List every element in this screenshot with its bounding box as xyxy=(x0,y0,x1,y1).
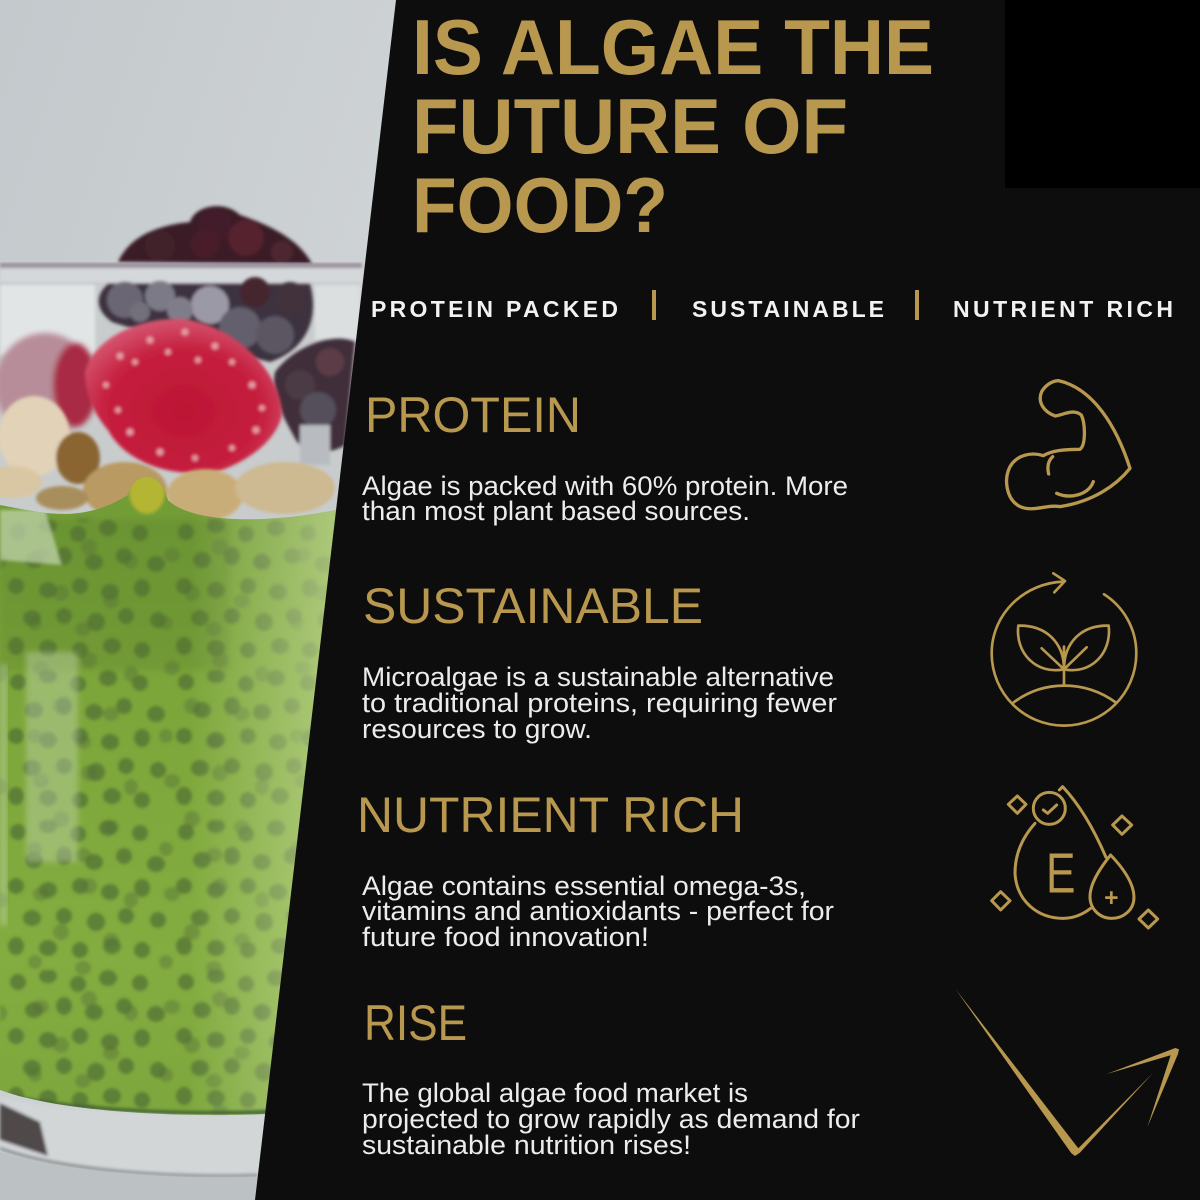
pale raspberry behind xyxy=(0,333,97,437)
heading: sustainable: SUSTAINABLE xyxy=(363,578,703,634)
text: sustainable: Microalgae is a sustainable alternative xyxy=(362,662,834,692)
glass upper wall xyxy=(0,284,360,356)
text: protein: Algae is packed with 60% protein. More xyxy=(362,471,848,501)
icon: vitamin E drops: E xyxy=(1046,841,1075,905)
glass rim xyxy=(0,263,362,282)
text: protein: than most plant based sources. xyxy=(362,496,750,526)
black corner block xyxy=(1005,0,1200,188)
text: sustainable xyxy=(362,662,837,744)
chia seeds xyxy=(0,518,345,1118)
text: rise: sustainable nutrition rises! xyxy=(362,1130,691,1160)
icon: rising arrow xyxy=(956,989,1179,1156)
section: sustainable xyxy=(362,573,1136,744)
text: nutrient rich xyxy=(362,871,834,952)
glass reflections xyxy=(0,510,78,925)
title: FOOD? xyxy=(412,161,668,249)
tagline strip: SUSTAINABLE xyxy=(692,296,884,322)
table surface xyxy=(0,1152,258,1200)
glass base xyxy=(0,1098,266,1176)
tagline strip: NUTRIENT RICH xyxy=(953,296,1173,322)
right side light falloff xyxy=(206,510,336,1115)
text: rise xyxy=(362,1078,860,1160)
title xyxy=(412,3,934,249)
title: FUTURE OF xyxy=(412,82,848,170)
dark berries above rim xyxy=(118,206,312,264)
granola xyxy=(0,396,335,521)
yellow drip highlight xyxy=(129,470,165,514)
section: rise xyxy=(362,989,1179,1160)
photo: green chia smoothie glass with berries xyxy=(0,0,400,1200)
section: nutrient rich xyxy=(357,787,1158,952)
heading: protein: PROTEIN xyxy=(365,387,581,443)
smoothie body xyxy=(0,460,345,1125)
text: nutrient rich: vitamins and antioxidants - perfect for xyxy=(362,896,834,926)
title: IS ALGAE THE xyxy=(412,3,934,91)
text: rise: projected to grow rapidly as demand for xyxy=(362,1104,860,1134)
icon: vitamin E drops xyxy=(992,787,1158,928)
icon: plant in cycle xyxy=(992,573,1136,726)
tagline strip: PROTEIN PACKED xyxy=(371,296,618,322)
dark background panel xyxy=(255,0,1200,1200)
section: protein xyxy=(362,381,1130,526)
text: protein xyxy=(362,471,848,526)
text: rise: The global algae food market is xyxy=(362,1078,748,1108)
text: sustainable: resources to grow. xyxy=(362,714,592,744)
darker seed band near the top xyxy=(0,520,230,670)
photo background wall xyxy=(0,0,400,1200)
heading: nutrient rich: NUTRIENT RICH xyxy=(357,787,744,843)
heading: rise: RISE xyxy=(364,995,467,1051)
icon: flexed arm xyxy=(1007,381,1130,509)
frosted blackberries xyxy=(99,277,355,465)
text: nutrient rich: Algae contains essential omega-3s, xyxy=(362,871,806,901)
smoothie bottom edge xyxy=(0,1095,268,1113)
text: sustainable: to traditional proteins, requiring fewer xyxy=(362,688,837,718)
icon: vitamin E drops: + xyxy=(1104,885,1119,912)
raspberry xyxy=(85,319,282,473)
tagline strip xyxy=(371,290,1173,322)
text: nutrient rich: future food innovation! xyxy=(362,922,649,952)
